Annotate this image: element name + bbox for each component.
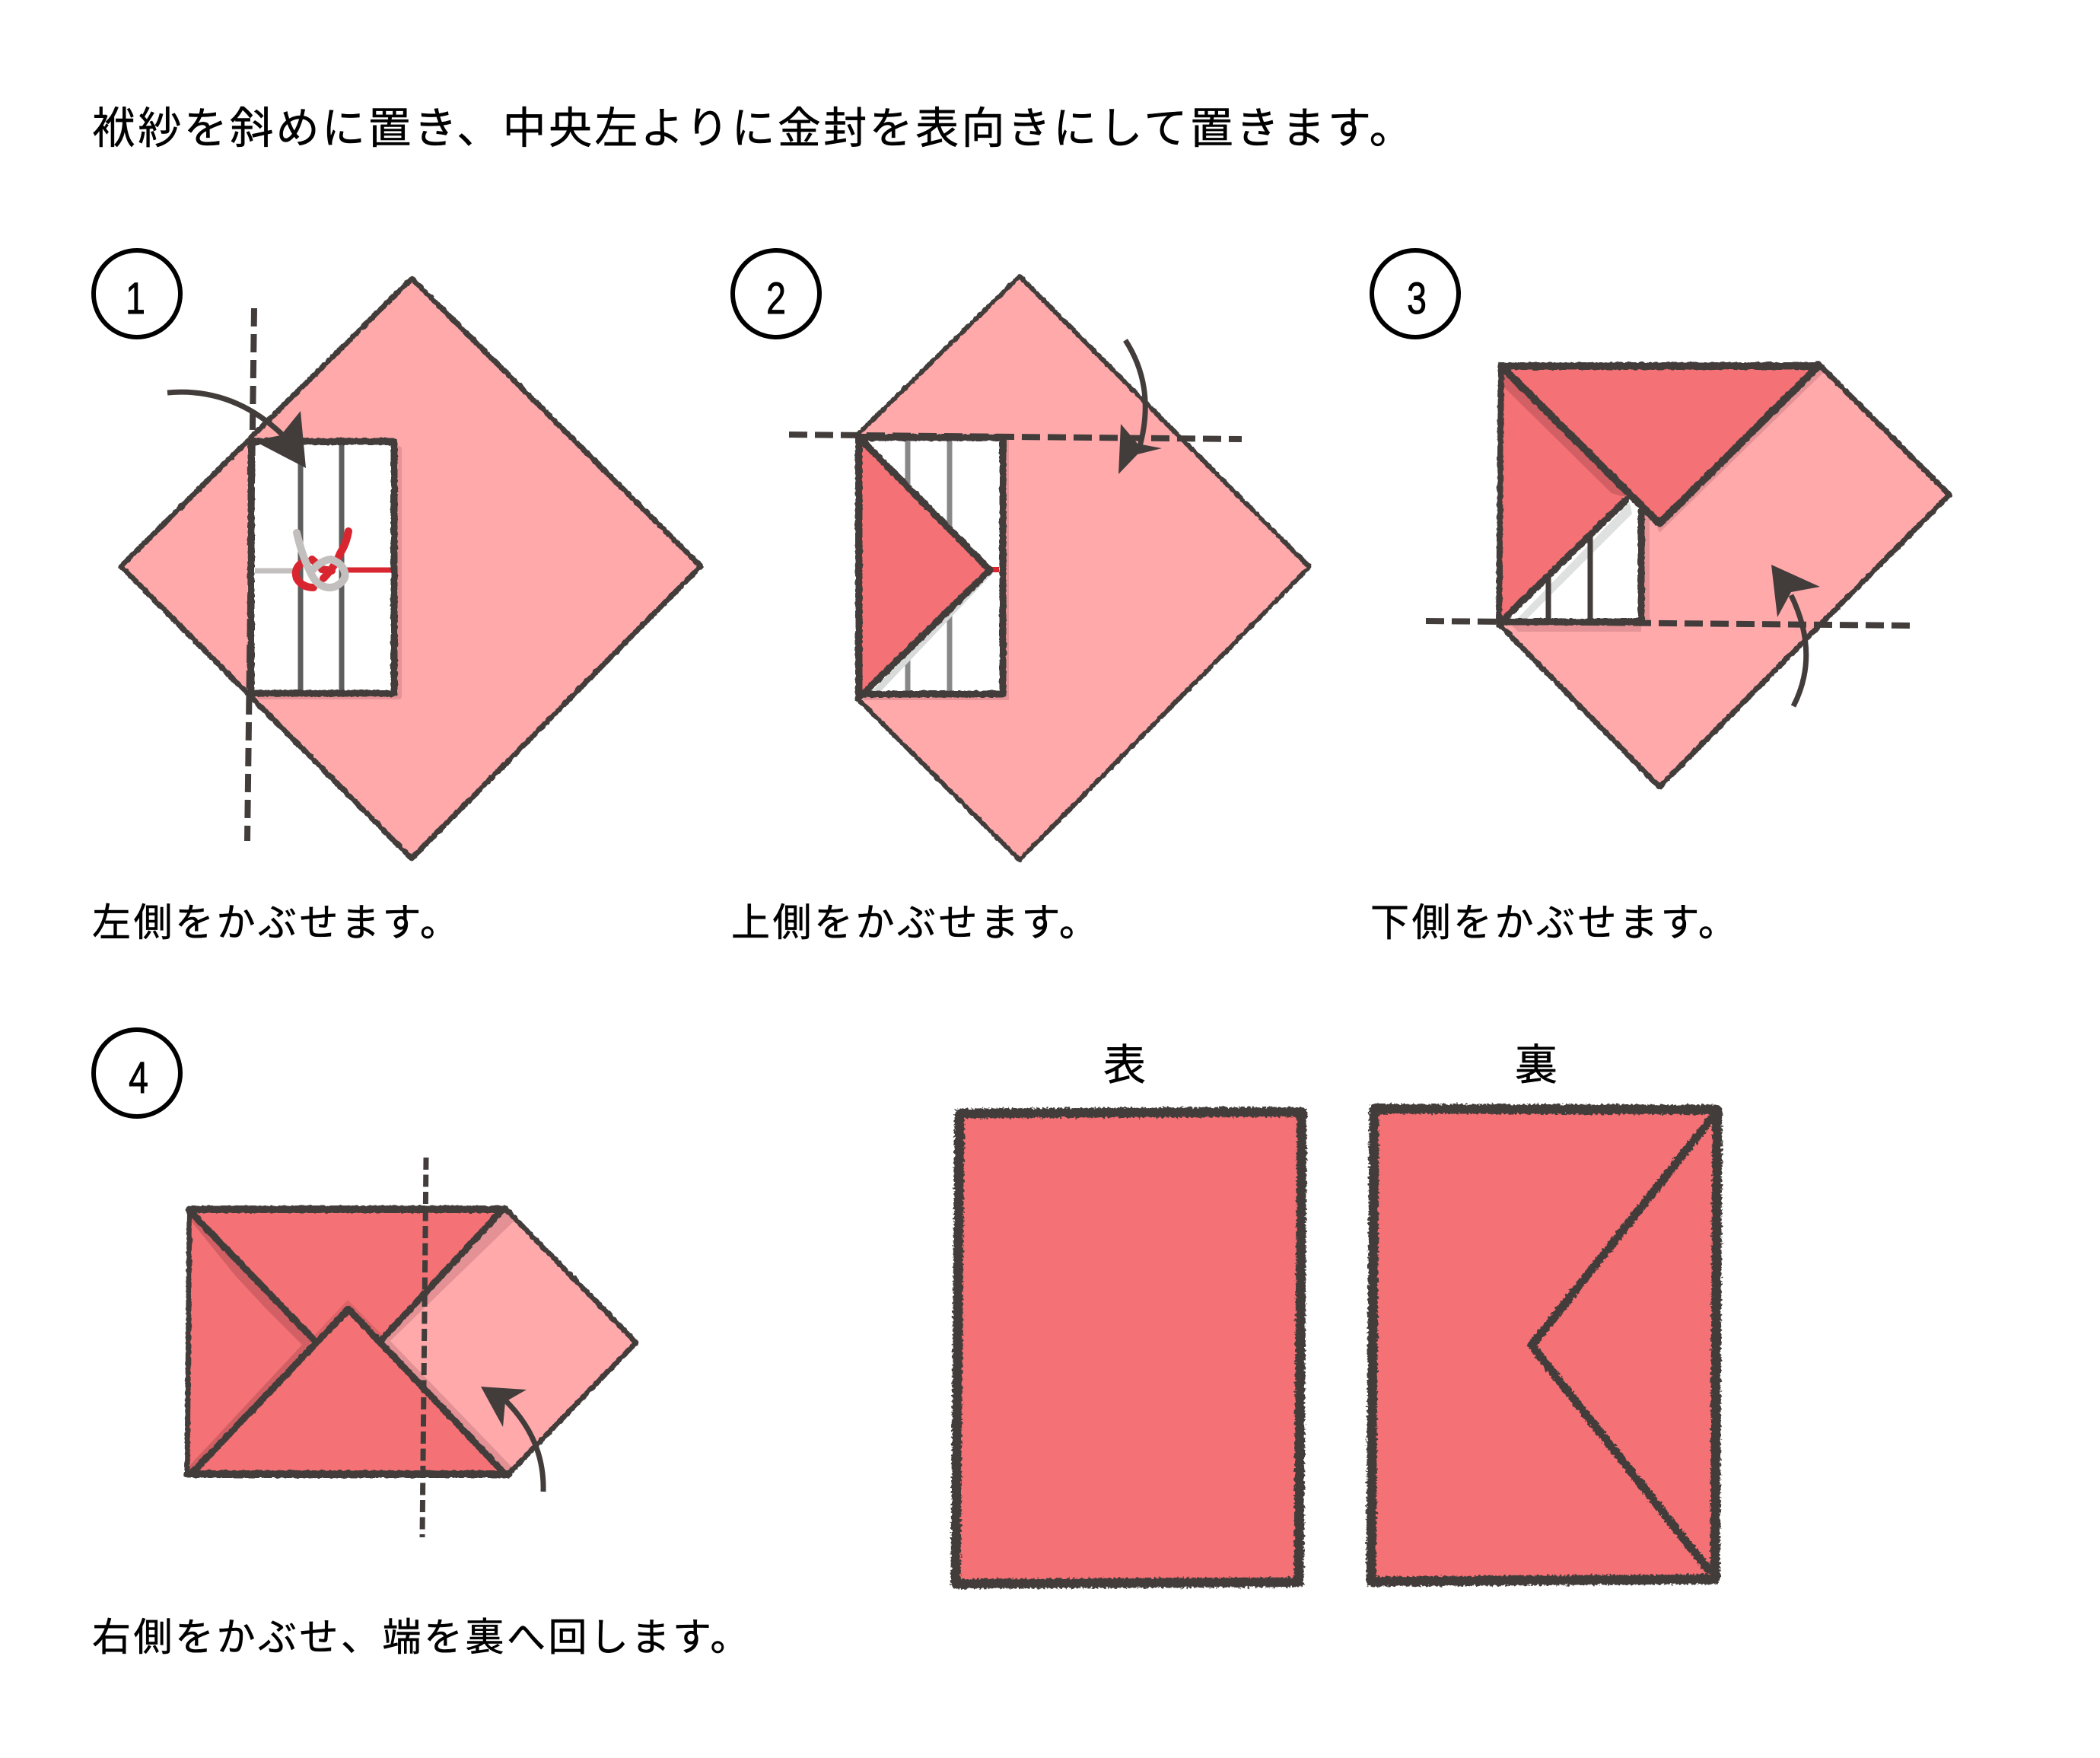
folded left flap (860, 438, 991, 696)
panel: finished front (956, 1041, 1302, 1584)
step number 4: 4 (129, 1053, 148, 1103)
left flap (1500, 368, 1626, 623)
fold line (789, 435, 1242, 439)
bottom flap (192, 1308, 506, 1474)
diamond outline (121, 279, 701, 858)
caption: 上側をかぶせます。 (731, 901, 1100, 944)
outlines (187, 1208, 636, 1474)
step number 3 (1372, 250, 1459, 337)
outlines (858, 276, 1309, 860)
finished fukusa back (1371, 1109, 1717, 1581)
label: back: 裏 (1515, 1041, 1558, 1089)
step number 1 (94, 250, 180, 337)
step number 2: 2 (766, 274, 786, 323)
top flap (189, 1208, 504, 1342)
caption: 左側をかぶせます。 (92, 901, 461, 944)
envelope remainder (1503, 498, 1641, 624)
outlines (1499, 364, 1949, 787)
step number 4 (94, 1030, 180, 1116)
caption: 右側をかぶせ、端を裏へ回します。 (92, 1616, 752, 1659)
left flap (187, 1209, 315, 1474)
panel: step 3 (1370, 250, 1949, 944)
panel: step 1 (92, 250, 701, 944)
fukusa body (1499, 364, 1949, 787)
panel: step 2 (731, 250, 1309, 944)
fold arrow (1118, 340, 1162, 474)
finished fukusa front (956, 1112, 1302, 1584)
panel: finished back (1371, 1041, 1717, 1581)
caption: 下側をかぶせます。 (1370, 901, 1739, 944)
fold line (247, 308, 254, 841)
envelope with cord (251, 441, 402, 699)
fold line (422, 1158, 426, 1537)
step number 2 (733, 250, 819, 337)
fukusa diamond (121, 279, 701, 858)
top flap (1501, 364, 1818, 524)
fold arrow (481, 1387, 543, 1492)
fold line (1426, 621, 1911, 626)
step number 3: 3 (1407, 274, 1427, 323)
label: front: 表 (1103, 1041, 1146, 1089)
fukusa body (858, 276, 1309, 860)
right flap (380, 1208, 636, 1474)
panel: step 4 (92, 1030, 752, 1659)
title: 袱紗を斜めに置き、中央左よりに金封を表向きにして置きます。 (92, 104, 1415, 153)
fold arrow (1771, 565, 1820, 706)
envelope (860, 435, 1009, 700)
fold arrow (167, 392, 306, 468)
shadows (1643, 364, 1825, 533)
step number 1: 1 (126, 274, 145, 323)
